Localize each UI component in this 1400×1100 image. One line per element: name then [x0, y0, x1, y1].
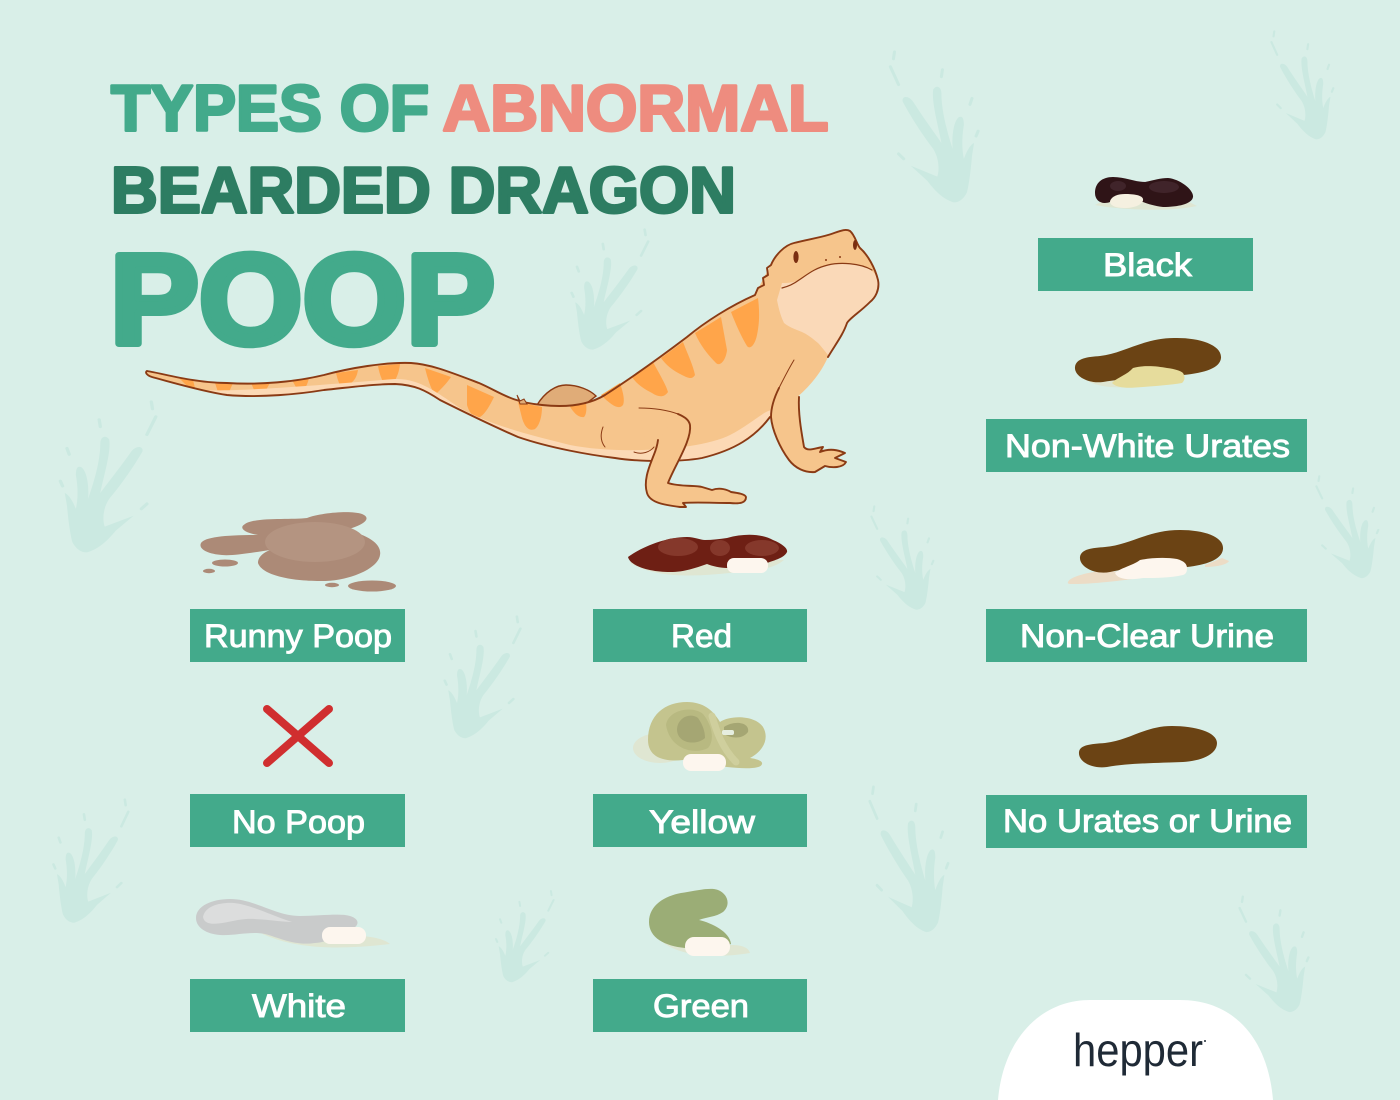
icon: footprint top centre	[890, 52, 978, 202]
belly highlight	[200, 379, 772, 461]
back stripes	[178, 298, 759, 430]
icon: footprint lower middle	[870, 787, 948, 932]
label: red	[593, 609, 807, 662]
item: yellow	[593, 702, 807, 847]
icon: footprint top right	[1271, 31, 1333, 139]
icon: footprint bottom centre	[496, 891, 554, 982]
front leg	[771, 360, 846, 472]
icon: footprint beside title	[572, 230, 648, 350]
mouth line	[782, 263, 872, 288]
poop: black	[1095, 177, 1197, 210]
icon: footprint middle right	[871, 506, 933, 610]
icon: footprint far right	[1316, 476, 1378, 578]
body outline	[146, 230, 878, 461]
back spikes	[517, 395, 527, 404]
poop: no urates or urine	[1079, 726, 1217, 767]
poop: runny	[200, 512, 396, 592]
label: green	[593, 979, 807, 1032]
throat	[777, 263, 878, 355]
label: non-clear urine: Non-Clear Urine	[1020, 618, 1274, 654]
label: white	[190, 979, 405, 1032]
item: green	[593, 889, 807, 1032]
poop: white	[196, 899, 390, 947]
label: white: White	[252, 988, 346, 1024]
icon: footprint centre	[445, 617, 520, 738]
logo: hepper: hepper	[1073, 1024, 1203, 1076]
nostril	[853, 240, 857, 250]
poop: non-white urates	[1075, 338, 1221, 388]
label: no poop	[190, 794, 405, 847]
label: no poop: No Poop	[232, 804, 365, 840]
item: no urates or urine	[986, 726, 1307, 848]
face dots	[825, 256, 841, 261]
far hind leg	[537, 385, 596, 412]
label: no urates or urine	[986, 795, 1307, 848]
label: red: Red	[671, 618, 732, 654]
poop: green	[649, 889, 750, 956]
eye	[793, 251, 799, 263]
label: no urates or urine: No Urates or Urine	[1003, 803, 1292, 839]
label: runny poop: Runny Poop	[204, 618, 392, 654]
item: non-white urates	[986, 338, 1307, 472]
icon: footprint left	[60, 402, 156, 552]
item: non-clear urine	[986, 530, 1307, 662]
title line 1: TYPES OF	[111, 72, 429, 144]
title line 2: BEARDED DRAGON	[111, 154, 736, 226]
poop: non-clear urine	[1068, 530, 1229, 584]
item: black	[1038, 177, 1253, 291]
item: no poop	[190, 709, 405, 847]
body fold lines	[601, 427, 654, 453]
icon: red cross	[267, 709, 329, 763]
title line 1: ABNORMAL	[442, 72, 828, 144]
label: runny poop	[190, 609, 405, 662]
label: non-clear urine	[986, 609, 1307, 662]
illustration: bearded dragon	[146, 230, 878, 507]
label: non-white urates: Non-White Urates	[1005, 428, 1290, 464]
label: black: Black	[1103, 247, 1193, 283]
white badge	[998, 1000, 1273, 1100]
icon: footprint lower left	[53, 800, 128, 923]
title	[110, 72, 828, 372]
label: yellow	[593, 794, 807, 847]
item: red	[593, 535, 807, 662]
title line 3: POOP	[110, 228, 495, 372]
label: black	[1038, 238, 1253, 291]
poop: yellow	[633, 702, 766, 771]
poop: red	[628, 535, 787, 575]
icon: footprint bottom right	[1240, 897, 1308, 1012]
item: white	[190, 899, 405, 1032]
label: green: Green	[653, 988, 749, 1024]
hind leg	[639, 408, 746, 507]
item: runny poop	[190, 512, 405, 662]
logo badge	[998, 1000, 1273, 1100]
body fill	[146, 230, 878, 461]
title line 1	[111, 72, 828, 144]
label: non-white urates	[986, 419, 1307, 472]
label: yellow: Yellow	[649, 804, 756, 840]
